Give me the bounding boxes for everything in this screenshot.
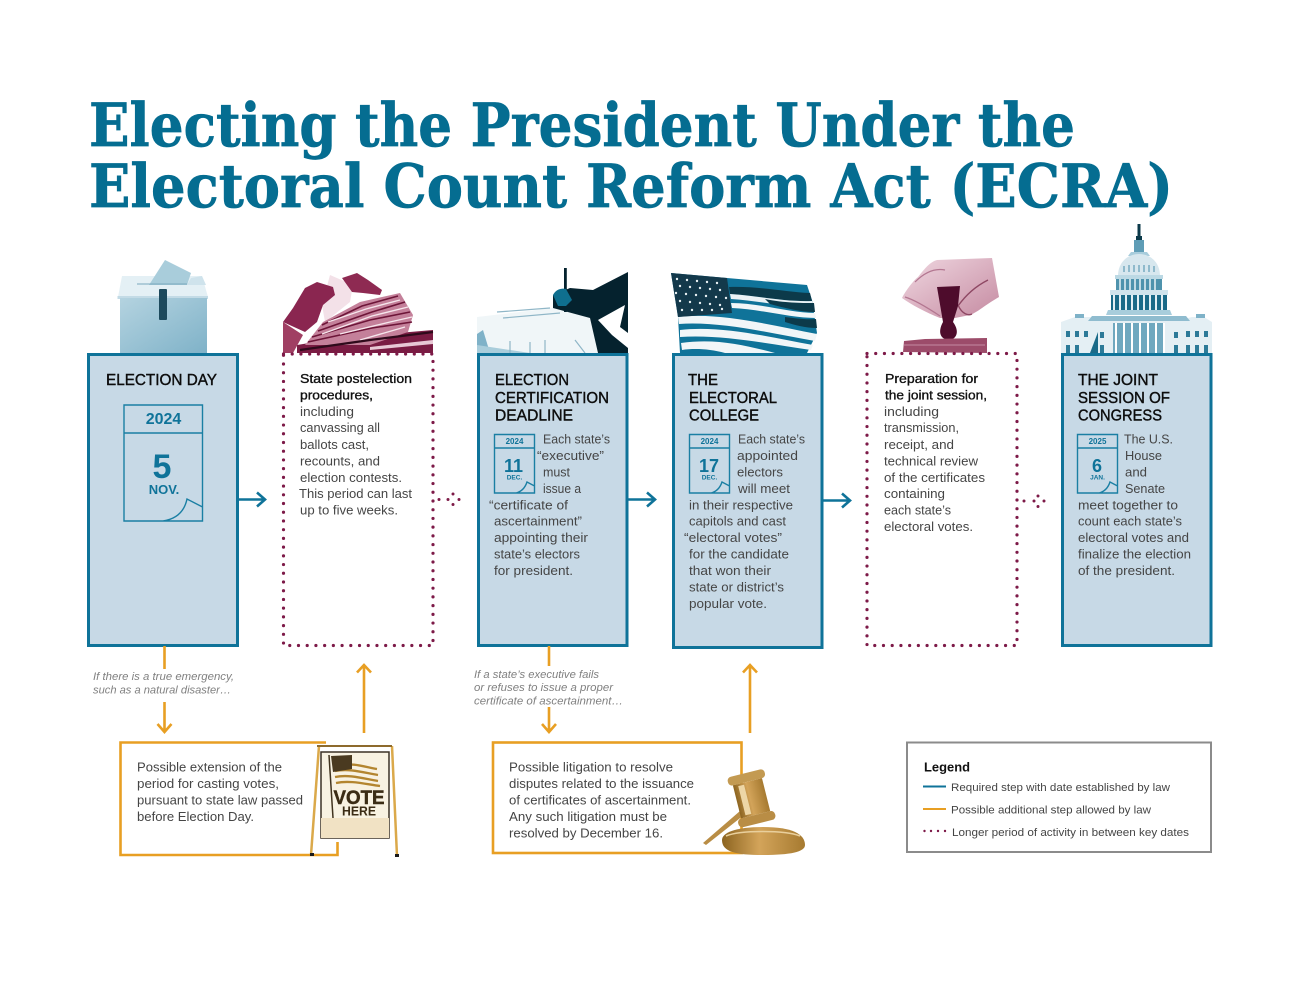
heading: The Electoral College: THE <box>688 372 718 389</box>
text: ascertainment condition: or refuses to issue a proper <box>474 682 614 694</box>
text: litigation description: Possible litigation to resolve <box>509 760 673 774</box>
panel: possible litigation <box>493 742 742 853</box>
title <box>89 91 1173 222</box>
text: Electoral College description: will meet <box>737 481 790 496</box>
text: preparation description: receipt, and <box>884 437 954 452</box>
text: extension description: Possible extension of the <box>137 760 282 774</box>
icon: calendar January 6 2025: 2025 <box>1089 437 1107 446</box>
text: postelection description: canvassing all <box>300 420 380 435</box>
panel: State postelection procedures <box>284 354 433 646</box>
image: hands sorting ballots <box>283 273 433 353</box>
text: litigation description: of certificates of ascertainment. <box>509 792 691 808</box>
icon: calendar November 5 2024: 2024 <box>146 411 181 428</box>
text: ascertainment condition: certificate of ascertainment… <box>474 696 623 708</box>
text: litigation description: resolved by December 16. <box>509 826 663 840</box>
text: emergency condition: If there is a true emergency, <box>93 671 234 683</box>
text: Electoral College description: popular vote. <box>689 596 767 611</box>
heading: The Electoral College <box>688 372 777 424</box>
legend title: Legend <box>924 760 970 774</box>
text: certification description: for president. <box>494 563 573 578</box>
image: ballot box <box>118 260 208 353</box>
text: joint session description: finalize the election <box>1078 546 1191 562</box>
heading: Election certification deadline: ELECTION <box>495 372 569 389</box>
arrow: certification to Electoral College <box>628 492 655 506</box>
icon: calendar January 6 2025: JAN. <box>1090 474 1105 482</box>
heading: The joint session of Congress: CONGRESS <box>1078 408 1162 424</box>
title: Electing the President Under the <box>89 91 1075 161</box>
heading: Election certification deadline: DEADLINE <box>495 408 573 424</box>
arrow: certification down to possible litigation <box>542 646 556 732</box>
text: postelection description: election contests. <box>300 470 402 485</box>
text: joint session description: count each state’s <box>1078 514 1182 528</box>
text: Electoral College description: capitols and cast <box>689 514 786 528</box>
connector: dotted link to joint session <box>1022 494 1046 508</box>
icon: calendar December 17 2024: DEC. <box>702 474 717 482</box>
text: preparation description: Preparation for <box>885 371 979 386</box>
icon: calendar November 5 2024: NOV. <box>149 482 179 497</box>
text: joint session description: of the president. <box>1078 563 1175 578</box>
icon: calendar January 6 2025: 6 <box>1092 456 1102 476</box>
heading: The joint session of Congress: SESSION OF <box>1078 390 1170 407</box>
text: joint session description: electoral votes and <box>1078 530 1189 545</box>
heading: The Electoral College: COLLEGE <box>689 408 759 424</box>
text: Electoral College description: that won their <box>689 563 772 578</box>
text: Electoral College description: “electoral votes” <box>684 530 782 545</box>
text: extension description: pursuant to state law passed <box>137 792 303 808</box>
text: preparation description: including <box>884 404 939 419</box>
text: joint session description <box>1078 432 1191 578</box>
panel: Election certification deadline <box>478 354 627 646</box>
text: certification description: Each state’s <box>543 432 610 446</box>
text: Electoral College description: for the candidate <box>689 546 789 562</box>
image: waving American flag <box>671 273 817 353</box>
panel: Preparation for the joint session <box>867 354 1017 646</box>
text: certification description: issue a <box>543 481 582 496</box>
image: Vote Here sign: VOTE <box>334 787 384 809</box>
text: postelection description <box>299 371 412 518</box>
heading: The joint session of Congress: THE JOINT <box>1078 372 1159 389</box>
arrow: extension up to postelection <box>357 665 371 733</box>
icon: calendar December 11 2024 <box>494 434 534 493</box>
heading: Election certification deadline: CERTIFICATION <box>495 390 609 407</box>
text: litigation description <box>509 760 694 840</box>
text: preparation description: transmission, <box>884 420 959 435</box>
icon: calendar December 17 2024: 2024 <box>701 437 719 446</box>
icon: calendar December 17 2024 <box>690 434 730 493</box>
text: Electoral College description: Each state’s <box>738 432 805 446</box>
text: Electoral College description: appointed <box>737 448 798 463</box>
text: certification description: “executive” <box>537 448 604 463</box>
text: ascertainment condition <box>474 669 623 708</box>
text: certification description <box>489 432 610 578</box>
text: joint session description: and <box>1125 464 1147 480</box>
text: postelection description: recounts, and <box>300 454 380 468</box>
text: extension description <box>137 760 303 824</box>
panel: The Electoral College <box>674 354 822 648</box>
text: Electoral College description: electors <box>737 464 783 480</box>
text: certification description: appointing their <box>494 530 589 545</box>
arrow: Election Day down to possible extension <box>158 646 172 732</box>
text: preparation description <box>884 371 987 534</box>
text: postelection description: up to five weeks. <box>300 502 398 518</box>
text: preparation description: electoral votes. <box>884 519 973 534</box>
icon: calendar December 11 2024: DEC. <box>507 474 522 482</box>
text: preparation description: of the certificates <box>884 470 985 485</box>
legend item: required step: Required step with date established by law <box>951 782 1171 794</box>
arrow: Election Day to postelection <box>238 492 265 506</box>
text: litigation description: disputes related to the issuance <box>509 776 694 791</box>
text: preparation description: each state’s <box>884 502 951 518</box>
panel: possible extension <box>120 742 338 855</box>
image: gavel <box>703 768 805 855</box>
heading: Election Day: ELECTION DAY <box>106 372 217 389</box>
panel: The joint session of Congress <box>1062 354 1211 646</box>
connector: dotted link to certification deadline <box>438 492 460 506</box>
text: extension description: period for casting votes, <box>137 776 279 791</box>
text: preparation description: containing <box>884 486 945 501</box>
heading: Election certification deadline <box>495 372 609 424</box>
text: preparation description: technical review <box>884 454 978 468</box>
text: emergency condition: such as a natural disaster… <box>93 684 231 696</box>
text: joint session description: Senate <box>1125 481 1165 496</box>
image: Vote Here sign <box>310 745 399 857</box>
image: hand pressing a rubber stamp <box>902 258 999 353</box>
text: emergency condition <box>93 671 234 696</box>
text: certification description: state’s electors <box>494 546 580 562</box>
icon: calendar November 5 2024: 5 <box>153 448 171 486</box>
text: postelection description: ballots cast, <box>300 437 369 452</box>
text: litigation description: Any such litigation must be <box>509 809 667 824</box>
title: Electoral Count Reform Act (ECRA) <box>89 152 1173 222</box>
heading: The joint session of Congress <box>1078 372 1170 424</box>
text: Electoral College description: state or district’s <box>689 580 784 594</box>
text: Electoral College description: in their respective <box>689 498 793 512</box>
text: preparation description: the joint session, <box>885 388 987 402</box>
legend item: possible additional step: Possible additional step allowed by law <box>951 804 1152 816</box>
icon: calendar January 6 2025 <box>1078 434 1118 493</box>
text: joint session description: The U.S. <box>1124 432 1173 446</box>
legend item: longer period: Longer period of activity in between key dates <box>952 827 1189 839</box>
text: certification description: ascertainment” <box>494 514 582 528</box>
arrow: litigation up to Electoral College <box>743 665 757 733</box>
panel: Election Day <box>88 354 238 646</box>
icon: calendar November 5 2024 <box>124 405 202 521</box>
legend <box>907 742 1211 852</box>
image: U.S. Capitol building <box>1061 224 1212 353</box>
text: certification description: must <box>543 464 570 480</box>
heading: The Electoral College: ELECTORAL <box>689 390 777 407</box>
icon: calendar December 17 2024: 17 <box>699 456 719 476</box>
text: joint session description: meet together to <box>1078 498 1178 512</box>
text: certification description: “certificate of <box>489 498 568 512</box>
text: extension description: before Election Day. <box>137 809 254 824</box>
text: Electoral College description <box>684 432 805 611</box>
text: postelection description: State postelection <box>300 371 412 386</box>
icon: calendar December 11 2024: 11 <box>504 456 523 476</box>
icon: calendar December 11 2024: 2024 <box>506 437 524 446</box>
text: joint session description: House <box>1125 448 1162 463</box>
text: postelection description: This period can last <box>299 486 412 501</box>
text: postelection description: procedures, <box>300 388 373 402</box>
text: postelection description: including <box>300 404 354 419</box>
text: ascertainment condition: If a state’s executive fails <box>474 669 599 681</box>
image: Vote Here sign: HERE <box>342 804 376 818</box>
image: hand signing a document <box>477 268 628 353</box>
arrow: Electoral College to preparation <box>823 494 850 508</box>
